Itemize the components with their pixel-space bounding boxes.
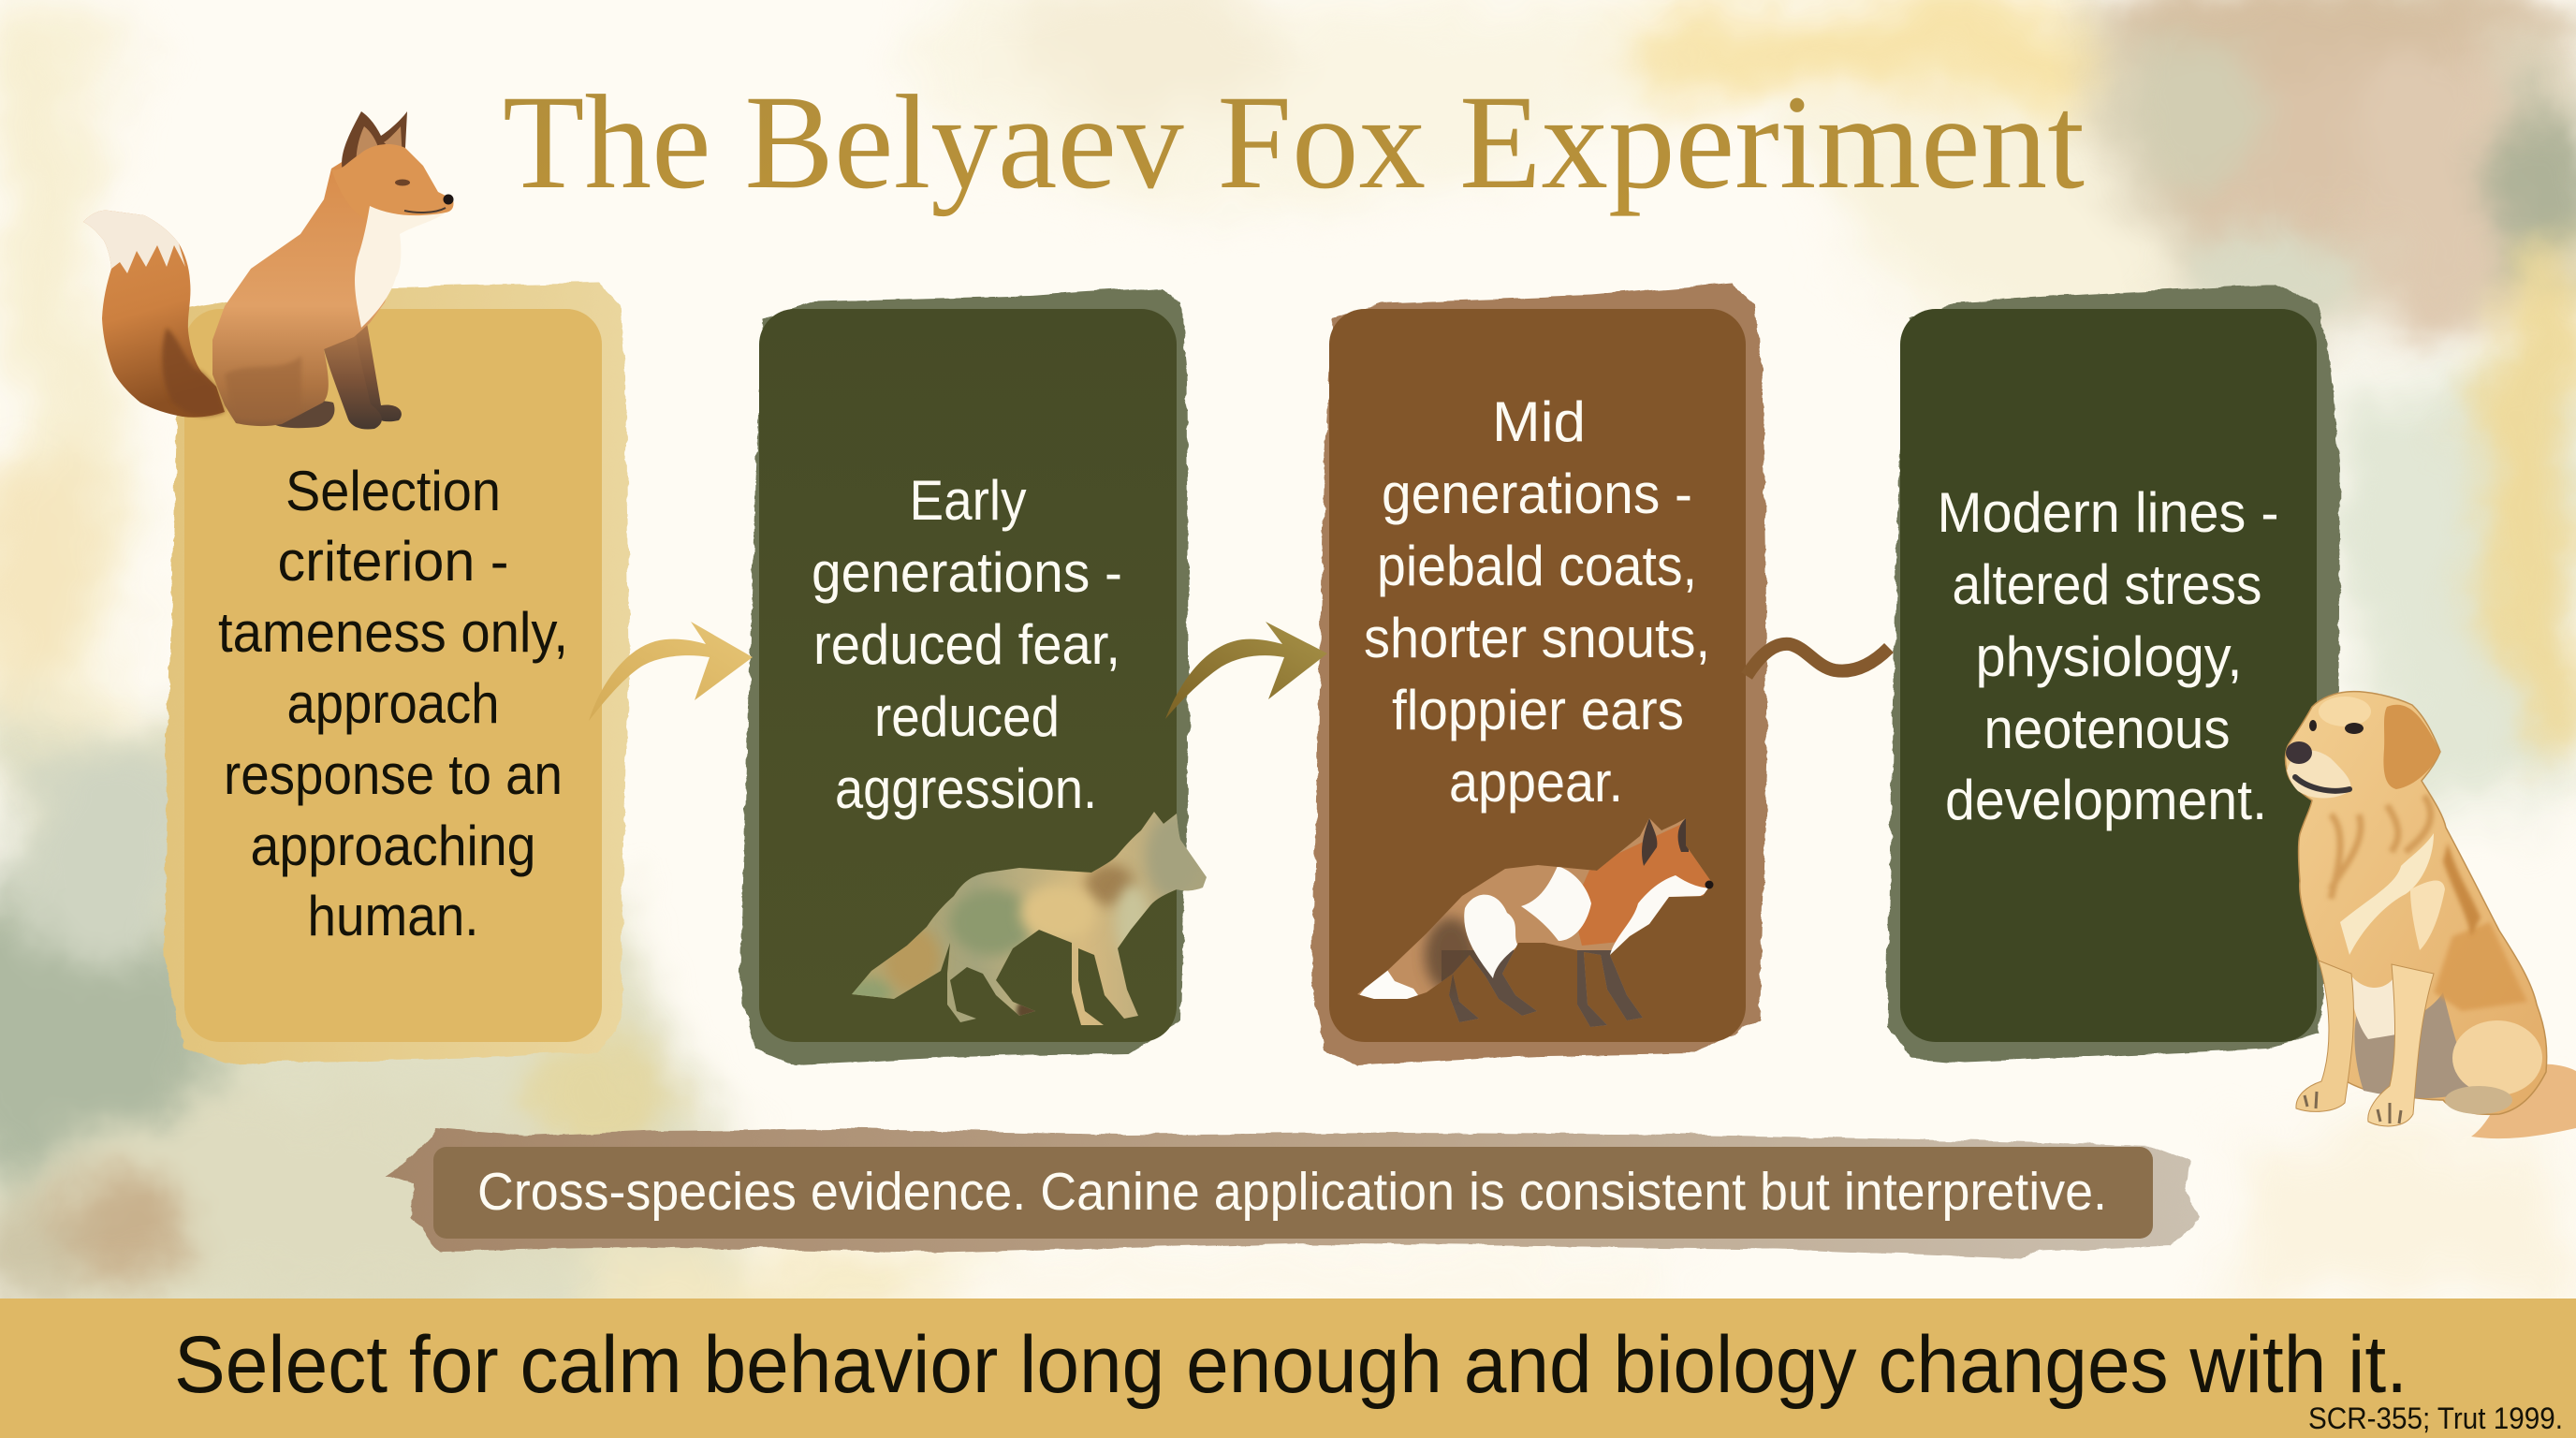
icon: sitting fox	[83, 111, 454, 430]
modern lines text: neotenous	[1984, 697, 2230, 760]
dog ear	[2383, 705, 2440, 789]
torn wash behind modern card	[1886, 285, 2340, 1063]
fox body	[212, 159, 400, 426]
selection criterion text	[218, 460, 568, 947]
mid generations text: appear.	[1449, 751, 1623, 814]
selection criterion text: approaching	[251, 814, 535, 877]
torn wash behind mid card	[1311, 284, 1767, 1065]
dog forehead	[2319, 697, 2371, 726]
early generations text: reduced	[874, 685, 1060, 748]
fox white chest	[355, 206, 446, 328]
title: The Belyaev Fox Experiment	[503, 68, 2085, 217]
dog back streak	[2443, 843, 2481, 936]
mid generations text: Mid	[1492, 390, 1586, 453]
selection criterion text: Selection	[285, 460, 501, 522]
selection criterion text: tameness only,	[218, 601, 568, 664]
dog thigh	[2452, 1020, 2542, 1095]
fox far leg	[354, 318, 402, 421]
mid generations text	[1364, 390, 1710, 814]
panel: selection criterion	[165, 283, 629, 1064]
fox inner ear	[356, 126, 402, 176]
fox head	[331, 144, 454, 225]
fox eye	[395, 180, 410, 185]
citation: SCR-355; Trut 1999.	[2308, 1401, 2563, 1435]
dog eyes	[2345, 723, 2364, 734]
fox tail tip	[83, 211, 185, 273]
fox nose	[444, 195, 453, 204]
early generations text	[812, 469, 1122, 820]
torn wash behind yellow card	[165, 283, 629, 1064]
early fox colour patches	[838, 814, 1203, 1024]
modern lines text: physiology,	[1975, 625, 2243, 688]
selection criterion text: criterion -	[277, 530, 509, 593]
arrow: wavy brown connector	[1747, 644, 1889, 676]
fox tail dark base	[162, 328, 225, 416]
dog neck ruff streaks	[2331, 796, 2431, 899]
dog hind paw	[2445, 1086, 2512, 1114]
icon: piebald fox	[1357, 818, 1713, 1027]
dog far eye	[2309, 720, 2317, 731]
mid generations text: generations -	[1382, 462, 1692, 525]
dog belly shadow	[2354, 992, 2476, 1098]
icon: early olive fox	[838, 812, 1207, 1025]
bottom band	[0, 1299, 2576, 1438]
arrow: yellow	[589, 622, 753, 721]
dog tail	[2471, 1064, 2576, 1138]
dog mouth	[2295, 777, 2349, 791]
piebald nose	[1705, 880, 1713, 889]
dog paw toes	[2305, 1092, 2401, 1123]
dog left front leg	[2296, 961, 2353, 1111]
dog right front leg	[2368, 964, 2434, 1126]
arrow: olive	[1165, 622, 1327, 719]
modern lines text: Modern lines -	[1938, 481, 2278, 544]
fox ears	[342, 111, 407, 187]
fox mouth	[404, 208, 446, 213]
dog hind shade	[2434, 922, 2527, 1011]
early fox silhouette	[852, 812, 1207, 1025]
early card body	[759, 309, 1177, 1042]
dog chest cream	[2349, 974, 2396, 1039]
fox thigh shade	[225, 356, 301, 421]
dog muzzle	[2287, 750, 2350, 798]
piebald silhouette	[1357, 818, 1712, 1027]
modern lines text	[1938, 481, 2278, 831]
modern lines text: development.	[1945, 769, 2267, 831]
icon: golden retriever	[2286, 692, 2576, 1138]
panel: modern lines	[1886, 285, 2340, 1063]
dog side light	[2410, 881, 2445, 950]
panel: early generations	[739, 287, 1189, 1065]
yellow card body	[184, 309, 602, 1042]
fox hind feet	[271, 401, 334, 428]
mid card body	[1329, 309, 1746, 1042]
early generations text: aggression.	[835, 757, 1097, 820]
modern card body	[1900, 309, 2317, 1042]
note box	[433, 1147, 2153, 1239]
early generations text: generations -	[812, 541, 1122, 604]
selection criterion text: approach	[286, 672, 500, 735]
dog nose	[2286, 741, 2312, 764]
callout: cross-species note	[386, 1129, 2200, 1258]
mid generations text: shorter snouts,	[1364, 607, 1710, 669]
mid generations text: piebald coats,	[1377, 535, 1697, 597]
dog chest streak	[2340, 833, 2434, 955]
early generations text: reduced fear,	[813, 613, 1120, 676]
fox near leg	[324, 323, 382, 430]
selection criterion text: response to an	[224, 743, 563, 806]
torn wash behind early card	[739, 287, 1189, 1065]
panel: mid generations	[1311, 284, 1767, 1065]
selection criterion text: human.	[307, 885, 479, 947]
note text: Cross-species evidence. Canine application is consistent but interpretive.	[477, 1162, 2107, 1222]
modern lines text: altered stress	[1953, 553, 2261, 616]
takeaway text: Select for calm behavior long enough and biology changes with it.	[174, 1320, 2408, 1410]
fox tail	[83, 211, 225, 418]
dog body	[2286, 692, 2547, 1114]
early generations text: Early	[910, 469, 1026, 532]
torn brown wash	[386, 1129, 2200, 1258]
piebald markings	[1359, 818, 1711, 1027]
mid generations text: floppier ears	[1392, 679, 1684, 741]
